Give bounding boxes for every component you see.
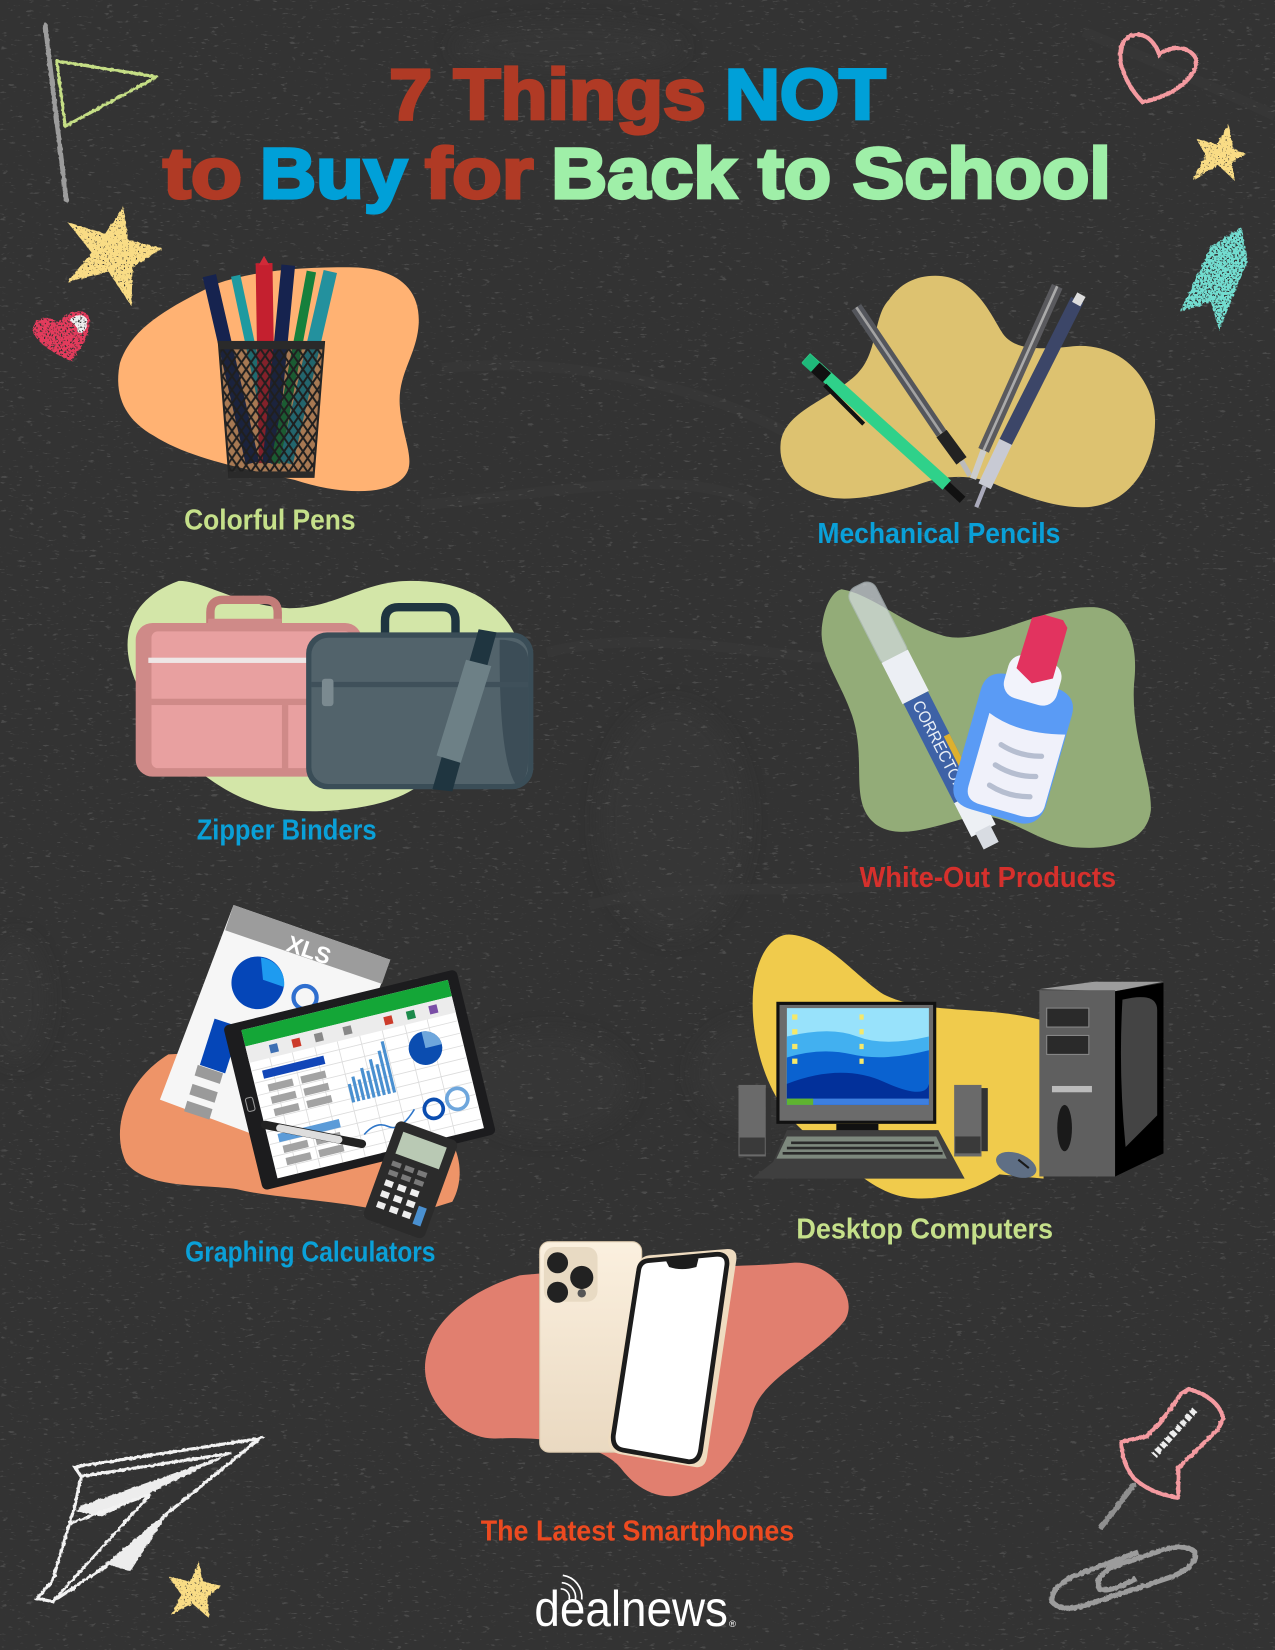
icon: keyboard [752, 1130, 965, 1179]
doodle: yellow star top right [1193, 124, 1246, 181]
doodle: paper plane [37, 1438, 260, 1602]
blob: orange [118, 267, 419, 491]
icon: calculator [362, 1120, 459, 1240]
label: Zipper Binders [197, 815, 377, 847]
icon: pens in mesh cup [209, 256, 330, 478]
title: to [163, 134, 242, 214]
icon: XLS document: XLS [283, 930, 334, 970]
title: Buy [260, 134, 407, 214]
doodle: yellow star bottom left [168, 1562, 221, 1618]
icon: corrector pen [845, 578, 1004, 852]
icon: phone front [608, 1249, 736, 1467]
label: Mechanical Pencils [817, 518, 1060, 550]
title [163, 55, 1111, 214]
label: Desktop Computers [796, 1214, 1053, 1246]
icon: XLS document [160, 905, 390, 1158]
icon: pencils [806, 286, 1081, 507]
doodle: push pin [1101, 1389, 1223, 1527]
logo: dealnews: dealnews [534, 1580, 728, 1637]
label: Graphing Calculators [185, 1237, 436, 1269]
blob: sage [822, 589, 1151, 848]
blob: light green [128, 581, 518, 811]
blob: salmon [425, 1263, 849, 1496]
logo: dealnews: ® [729, 1619, 736, 1630]
icon: correction fluid bottle [948, 604, 1096, 829]
doodle: pink outline heart [1120, 35, 1196, 102]
doodle: chalk flag [45, 25, 157, 200]
doodle: large yellow star [67, 206, 162, 306]
panel: desktop computers [738, 934, 1163, 1246]
doodle: teal ribbon [1180, 227, 1248, 330]
icon: pink binder [136, 600, 362, 777]
panel: graphing calculators [120, 905, 496, 1269]
doodle: paperclip [1052, 1547, 1195, 1608]
title: Back to School [551, 134, 1111, 214]
label: The Latest Smartphones [481, 1516, 794, 1548]
panel: zipper binders [128, 581, 533, 847]
blob: mustard [780, 276, 1155, 507]
icon: speakers [738, 1085, 988, 1156]
title: 7 Things [389, 55, 706, 135]
icon: corrector pen: CORRECTOR [908, 697, 970, 794]
icon: tower [1039, 982, 1163, 1176]
panel: the latest smartphones [425, 1242, 849, 1548]
panel: white-out products [822, 578, 1151, 894]
icon: mouse [992, 1147, 1040, 1183]
panel: colorful pens [118, 256, 419, 536]
blob: coral orange [120, 1052, 460, 1216]
icon: monitor [776, 1002, 936, 1136]
icon: spreadsheet tablet [223, 969, 496, 1191]
label: Colorful Pens [184, 504, 356, 536]
icon: phone back [540, 1242, 642, 1452]
title: for [425, 134, 533, 214]
doodle: red chalk heart [33, 311, 90, 361]
icon: stylus [265, 1125, 362, 1144]
label: White-Out Products [859, 862, 1116, 894]
title: NOT [725, 55, 886, 135]
panel: mechanical pencils [780, 276, 1155, 550]
icon: dark binder [306, 607, 533, 791]
blob: yellow [753, 934, 1044, 1199]
